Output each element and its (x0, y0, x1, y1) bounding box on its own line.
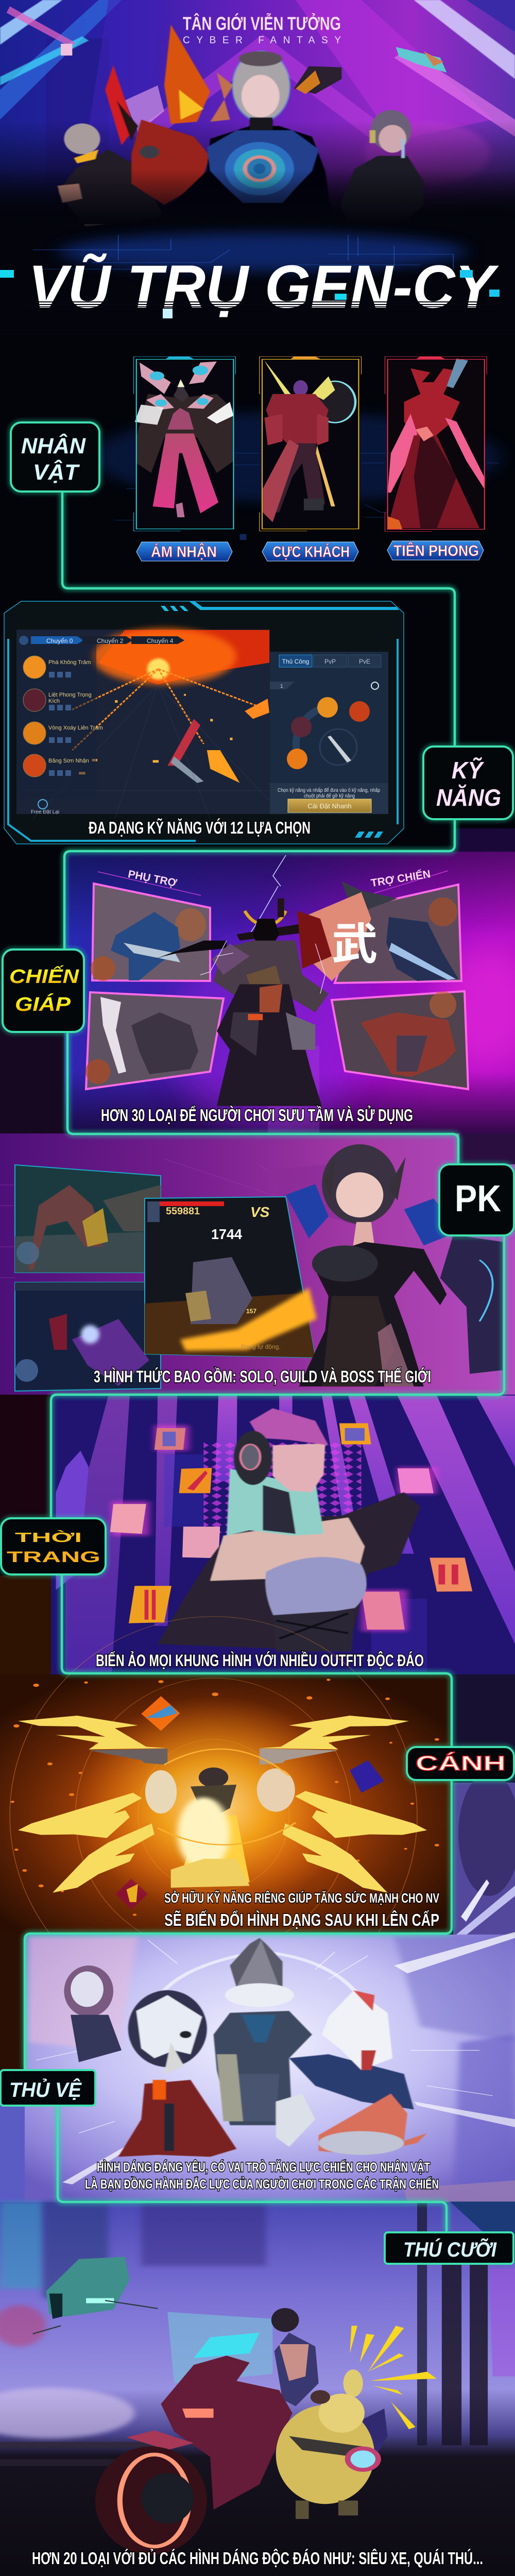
wing art (18, 1696, 427, 1913)
skill list: Vòng Xoáy Liên Trảm (48, 725, 103, 731)
skill loadout panel: chuột phải để gỡ kỹ năng (304, 793, 355, 799)
tabs: Chuyển 0 (46, 637, 73, 645)
skill loadout panel: 1 (280, 684, 283, 689)
character: samurai mecha (154, 881, 398, 1106)
character: yellow chick mascot (276, 2326, 437, 2519)
label: Thời Trang (1, 1518, 106, 1574)
label: tro chien (355, 868, 448, 899)
panel: battle armor (0, 828, 515, 1133)
battle screenshot: versus: VS (250, 1204, 270, 1220)
icon: teal hover craft (33, 2257, 158, 2334)
caption: skills: ĐA DẠNG KỸ NĂNG VỚI 12 LỰA CHỌN (89, 818, 311, 837)
label: Chiến Giáp: GIÁP (15, 993, 71, 1015)
label: phu tro (98, 868, 201, 895)
label: Kỹ Năng: NĂNG (436, 784, 501, 811)
card: Ám Nhận (134, 357, 235, 531)
skill list: Kích (48, 698, 60, 704)
logo (183, 12, 341, 46)
name plate: Cực Khách: CỰC KHÁCH (272, 543, 350, 561)
character: silver-haired heroine (158, 50, 332, 218)
character: PK heroine (286, 1144, 503, 1386)
battle screenshot: versus (145, 1197, 317, 1358)
skill list: Băng Sơn Nhận (48, 758, 89, 764)
label: Nhân Vật: VẬT (33, 460, 80, 485)
panel: PK (0, 1133, 515, 1395)
panel: characters (92, 357, 499, 561)
label: tro chien: TRỢ CHIẾN (370, 868, 432, 889)
label: Chiến Giáp (3, 950, 84, 1032)
connectors: neon path linking sections (25, 493, 504, 2231)
skill loadout panel: PvE (359, 658, 370, 665)
armor frame: top right (335, 885, 461, 983)
panel: skills game screen (4, 601, 404, 844)
label: Thời Trang: TRANG (7, 1549, 100, 1566)
caption: guardians (85, 2159, 439, 2192)
battle screenshot: versus: Đang tự động. (241, 1343, 281, 1350)
label: Kỹ Năng (423, 747, 513, 819)
label: Nhân Vật: NHÂN (21, 433, 86, 459)
skill list (23, 656, 103, 815)
label: Chiến Giáp: CHIẾN (9, 965, 80, 988)
panel: fashion (0, 1395, 515, 1674)
card: Tiên Phong (385, 357, 487, 532)
battle screenshot: guild (15, 1282, 161, 1391)
skill effect scene (16, 629, 270, 819)
label: Thủ Vệ (1, 2070, 95, 2106)
skill list: Liệt Phong Trọng (48, 692, 92, 698)
label: Thủ Vệ: THỦ VỆ (9, 2078, 82, 2102)
skill loadout panel: Cài Đặt Nhanh (307, 802, 352, 810)
panel: wings (0, 1617, 515, 2014)
character: woman with headset (340, 110, 424, 222)
logo: CYBER FANTASY (183, 35, 341, 46)
label: Thú Cưỡi: THÚ CƯỠI (403, 2238, 497, 2261)
skill loadout panel: PvP (324, 658, 336, 665)
skill loadout panel (270, 652, 388, 814)
label: PK (439, 1164, 514, 1235)
icon: flying vehicles (294, 47, 447, 94)
item tiles (110, 1423, 472, 1632)
icon: holographic map (167, 2312, 272, 2383)
armor frame: bottom right (332, 991, 468, 1089)
battle screenshot: versus: 157 (246, 1308, 256, 1315)
skill list: Phá Không Trảm (48, 659, 91, 666)
label: Cánh: CÁNH (416, 1752, 506, 1775)
label: PK: PK (455, 1178, 501, 1219)
character: red mecha (105, 25, 233, 205)
battle screenshot: boss (15, 1165, 161, 1273)
label: phu tro: PHỤ TRỢ (127, 868, 178, 889)
label: Kỹ Năng: KỸ (452, 757, 485, 784)
label: Thời Trang: THỜI (15, 1530, 82, 1545)
battle screenshot: versus: 1744 (211, 1226, 242, 1242)
tabs: Chuyển 2 (97, 637, 124, 645)
character: fashion girl (158, 1408, 420, 1651)
armor frame: bottom left (85, 992, 224, 1089)
panel: hero banner (0, 0, 515, 335)
armor frame: top left (91, 884, 210, 981)
label: Cánh (407, 1747, 514, 1780)
logo: TÂN GIỚI VIỄN TƯỞNG (183, 12, 341, 34)
character: man with goggles (58, 124, 164, 226)
caption: wings skills (164, 1890, 439, 1929)
tabs: Chuyển 4 (147, 637, 174, 645)
skill loadout panel: Chọn kỹ năng và nhấp để đưa vào ô kỹ năng, nhấp (278, 787, 380, 793)
skill loadout panel: Thủ Công (282, 658, 309, 665)
name plate: Ám Nhận: ÁM NHẬN (151, 543, 217, 561)
panel: mounts (0, 2201, 515, 2576)
skill list: Free Đặt Lại (31, 809, 59, 815)
label: Thú Cưỡi (385, 2232, 513, 2264)
caption: wings skills: SẼ BIẾN ĐỔI HÌNH DẠNG SAU KHI LÊN CẤP (164, 1910, 439, 1929)
panel: guardians (0, 1932, 515, 2205)
name plate: Tiên Phong: TIÊN PHONG (393, 542, 479, 560)
name plate: Ám Nhận (136, 542, 232, 561)
battle screenshot: versus: 559881 (166, 1206, 200, 1217)
title: VŨ TRỤ GEN-CY (28, 253, 499, 321)
card: Cực Khách (260, 357, 362, 531)
character: samurai mecha: 武 (332, 920, 377, 969)
label: Nhân Vật (11, 422, 99, 492)
character: guardians trio (118, 1938, 427, 2157)
character: rider and motorbike (95, 2308, 319, 2554)
tabs (19, 636, 184, 645)
